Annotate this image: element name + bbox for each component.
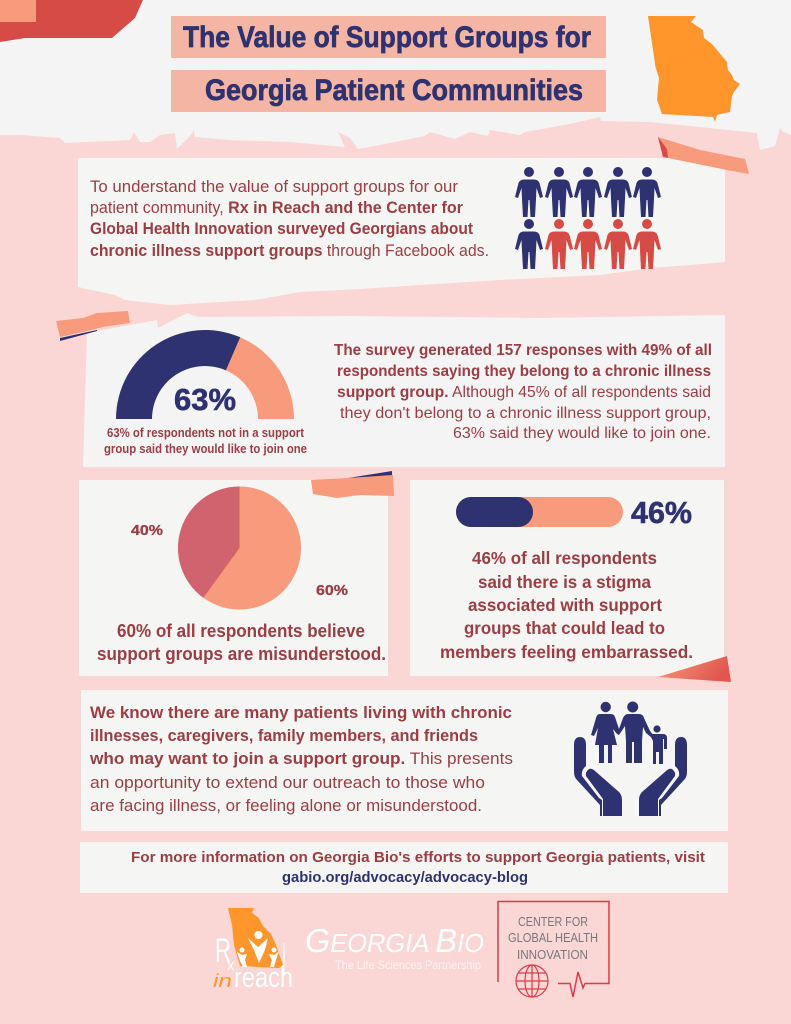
decorative tape left (56, 311, 130, 341)
text: survey summary: respondents saying they belong to a chronic illness (337, 363, 711, 380)
panel: survey results (83, 313, 725, 467)
text: misunderstood: support groups are misunderstood. (97, 644, 386, 664)
gauge caption: group said they would like to join one (104, 442, 307, 456)
text: stigma: said there is a stigma (478, 572, 651, 592)
text: introduction: Global Health Innovation surveyed Georgians about (90, 220, 473, 238)
text: call to action: For more information on Georgia Bio's efforts to support Georgia patients, visit (131, 849, 705, 866)
text: survey summary (334, 342, 712, 442)
gauge chart: 63%: 63% (174, 382, 236, 417)
text: stigma (440, 548, 693, 662)
logo: Center for Global Health Innovation (498, 902, 609, 997)
text: stigma: members feeling embarrassed. (440, 642, 693, 662)
title: Georgia Patient Communities (205, 74, 583, 107)
logo: Center for Global Health Innovation: GLOBAL HEALTH (508, 931, 598, 945)
text: introduction: patient community, Rx in Reach and the Center for (90, 199, 464, 217)
logo: Georgia Bio: GEORGIA BIO (305, 922, 484, 959)
pie label 40%: 40% (131, 522, 163, 539)
icon: map of Georgia (648, 16, 740, 122)
icon: hands holding family (574, 702, 687, 816)
decorative tape top right (658, 137, 749, 174)
link text: gabio.org/advocacy/advocacy-blog (282, 869, 528, 886)
panel: stigma progress bar (410, 480, 724, 676)
panel: more information (80, 842, 728, 893)
decorative tape middle (311, 471, 394, 498)
panel: opportunity (81, 690, 728, 831)
text: opportunity: We know there are many patients living with chronic (90, 703, 512, 722)
title (171, 16, 606, 112)
gauge caption (104, 426, 307, 456)
logo: Rx in Reach: R (215, 932, 231, 970)
text: survey summary: The survey generated 157 responses with 49% of all (334, 342, 712, 359)
text: survey summary: 63% said they would like to join one. (453, 425, 711, 442)
text: opportunity: are facing illness, or feeling alone or misunderstood. (90, 796, 482, 815)
text: misunderstood (97, 621, 386, 664)
text: survey summary: they don't belong to a chronic illness support group, (340, 405, 711, 422)
decorative tape bottom right (658, 656, 731, 682)
panel: misunderstood pie chart (79, 480, 388, 676)
panel: introduction (78, 158, 725, 305)
text: introduction: chronic illness support groups through Facebook ads. (90, 242, 489, 260)
torn paper header background (0, 0, 791, 150)
text: stigma: associated with support (468, 595, 662, 615)
pie label 60%: 60% (316, 582, 348, 599)
text: stigma: groups that could lead to (464, 618, 665, 638)
logo: Center for Global Health Innovation: CENTER FOR (518, 915, 588, 929)
text: stigma: 46% of all respondents (472, 548, 657, 568)
text: survey summary: support group. Although 45% of all respondents said (337, 384, 711, 401)
text: introduction (90, 178, 489, 260)
text: opportunity: who may want to join a support group. This presents (89, 749, 513, 768)
logo: Rx in Reach: x (227, 957, 235, 974)
logo: Rx in Reach: reach (234, 962, 293, 994)
icon: ten people, six navy and four red (515, 167, 661, 269)
text: misunderstood: 60% of all respondents believe (117, 621, 365, 641)
progress value: 46% (631, 495, 692, 530)
text: opportunity (89, 703, 513, 815)
logo: Georgia Bio: The Life Sciences Partnership (335, 958, 481, 972)
logo: Rx in Reach: in (213, 971, 232, 991)
decorative red corner shape (0, 0, 143, 42)
gauge caption: 63% of respondents not in a support (107, 426, 305, 440)
text: opportunity: an opportunity to extend our outreach to those who (90, 773, 485, 792)
text: opportunity: illnesses, caregivers, family members, and friends (90, 726, 478, 745)
logo: Center for Global Health Innovation: INNOVATION (517, 948, 588, 962)
gauge chart: 63% (116, 330, 294, 419)
progress bar: 46% (456, 497, 623, 527)
pie chart: 60/40 (178, 486, 301, 610)
logo: Rx in Reach (213, 908, 293, 994)
text: introduction: To understand the value of support groups for our (90, 178, 459, 196)
title: The Value of Support Groups for (183, 21, 591, 54)
